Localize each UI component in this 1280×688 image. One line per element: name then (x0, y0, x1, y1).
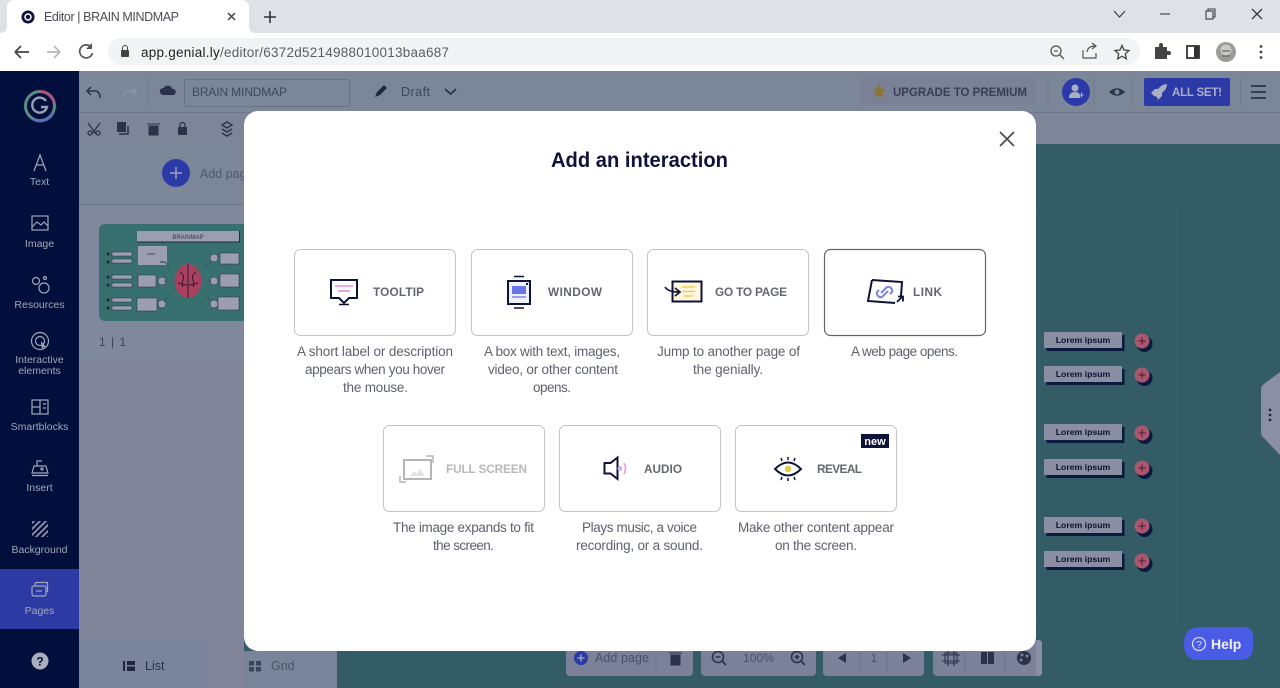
row 4: Lorem ipsum (1056, 462, 1111, 472)
page thumbnail: BRAINMAP (172, 235, 204, 241)
card: audio: Plays music, a voice (582, 520, 697, 535)
nav: insert: Insert (26, 482, 53, 494)
card: go to page: GO TO PAGE (715, 285, 787, 299)
help button: ? (1196, 640, 1202, 651)
logo (26, 92, 54, 121)
card: link (selected): A web page opens. (851, 344, 958, 359)
close icon (1000, 132, 1014, 146)
nav: smartblocks (11, 400, 68, 433)
editor top bar: BRAIN MINDMAP (192, 85, 287, 99)
card: tooltip: A short label or description (297, 344, 453, 359)
help button: Help (1211, 636, 1241, 652)
nav: insert (26, 461, 53, 494)
card: tooltip (294, 250, 456, 395)
card: full screen (disabled): The image expands to fit (393, 520, 534, 535)
grid tab (249, 659, 295, 673)
thumbnail rows (112, 252, 239, 311)
card: full screen (disabled): the screen. (433, 538, 494, 553)
bottom toolbar (566, 640, 1042, 676)
pages panel: 1 | 1 (99, 335, 126, 349)
browser toolbar: app.genial.ly/editor/6372d5214988010013baa687 (141, 45, 449, 60)
card: audio (560, 426, 720, 553)
row 2 (1044, 366, 1152, 386)
nav: interactive elements: Interactive (15, 354, 64, 366)
row 3: Lorem ipsum (1056, 427, 1111, 437)
nav: text (30, 155, 49, 188)
nav: interactive elements (15, 332, 64, 377)
card: full screen (disabled) (384, 426, 544, 553)
nav: text: Text (30, 176, 49, 188)
add page button: Add pag (200, 167, 247, 181)
thumbnail brain (174, 264, 202, 298)
card: window: A box with text, images, (484, 344, 620, 359)
browser tab strip: Editor | BRAIN MINDMAP (44, 10, 179, 24)
nav: pages (active) (0, 569, 79, 629)
icon: full screen (400, 456, 433, 482)
card: go to page: the genially. (693, 362, 763, 377)
canvas background (337, 144, 1280, 688)
card: window: opens. (533, 380, 571, 395)
icon: link (868, 280, 903, 303)
row 1 (1044, 332, 1152, 352)
card: reveal: Make other content appear (738, 520, 894, 535)
pages panel (79, 145, 337, 688)
card: window (472, 250, 632, 395)
nav: interactive elements: elements (18, 365, 61, 377)
help icon: ? (36, 654, 44, 668)
editor top bar (79, 71, 1280, 145)
row 6 (1044, 551, 1152, 572)
nav: resources: Resources (14, 299, 65, 311)
row 4 (1044, 459, 1152, 479)
card: reveal: on the screen. (775, 538, 857, 553)
card: audio: recording, or a sound. (576, 538, 703, 553)
help button (1184, 627, 1253, 660)
page thumbnail (99, 224, 244, 321)
bottom toolbar: Add page (595, 651, 649, 665)
row 1: Lorem ipsum (1056, 335, 1111, 345)
bottom toolbar: 1 (871, 651, 878, 665)
row 2: Lorem ipsum (1056, 369, 1111, 379)
nav: pages (active): Pages (25, 605, 54, 617)
card: tooltip: TOOLTIP (373, 285, 424, 299)
card: tooltip: appears when you hover (305, 362, 446, 377)
nav: image: Image (25, 238, 54, 250)
nav: resources (14, 276, 65, 311)
card: reveal: REVEAL (817, 462, 862, 476)
badge: new: new (864, 436, 886, 448)
editor top bar: Draft (401, 85, 431, 99)
right side handle (1261, 372, 1280, 455)
add page button (162, 159, 247, 187)
canvas lorem ipsum buttons (1044, 332, 1152, 572)
editor top bar: ALL SET! (1172, 87, 1222, 99)
card: audio: AUDIO (644, 462, 682, 476)
row 5 (1044, 517, 1152, 537)
row 5: Lorem ipsum (1056, 520, 1111, 530)
browser toolbar (0, 33, 1280, 71)
modal dialog (244, 111, 1036, 651)
modal title: Add an interaction (551, 149, 728, 172)
badge: new (861, 434, 889, 448)
list tab: List (145, 659, 165, 673)
nav: image (25, 216, 54, 250)
icon: audio (604, 458, 626, 479)
card: window: video, or other content (488, 362, 618, 377)
grid tab: Grid (271, 659, 295, 673)
bottom toolbar: 100% (743, 651, 774, 665)
card: go to page: Jump to another page of (657, 344, 800, 359)
editor top bar: UPGRADE TO PREMIUM (893, 87, 1027, 99)
card: full screen (disabled): FULL SCREEN (446, 462, 527, 476)
card: reveal (736, 426, 896, 553)
nav: background: Background (11, 544, 68, 556)
row 6: Lorem ipsum (1056, 554, 1111, 564)
left sidebar (0, 71, 79, 688)
help icon (32, 652, 48, 670)
card: link (selected): LINK (913, 285, 942, 299)
nav: smartblocks: Smartblocks (11, 421, 68, 433)
card: link (selected) (824, 250, 986, 359)
card: go to page (648, 250, 808, 377)
icon: go to page (665, 282, 702, 302)
card: tooltip: the mouse. (343, 380, 408, 395)
icon: tooltip (331, 280, 357, 304)
nav: background (12, 521, 67, 555)
window controls (1114, 9, 1262, 19)
row 3 (1044, 424, 1152, 444)
card: window: WINDOW (548, 285, 603, 299)
list tab (123, 659, 165, 673)
icon: reveal (775, 457, 801, 481)
browser tab strip (0, 0, 1280, 33)
icon: window (508, 276, 530, 308)
